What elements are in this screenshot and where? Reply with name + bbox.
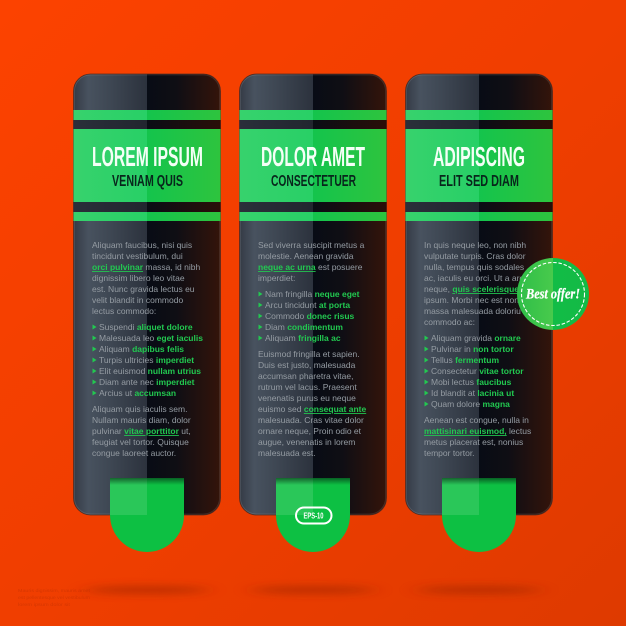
body text: Tellus fermentum: [431, 355, 499, 365]
panel: dolor amet: [240, 74, 386, 552]
ribbon: [406, 110, 552, 221]
body text: euismo sed consequat ante: [258, 404, 366, 414]
panel: adipiscing: [406, 74, 552, 552]
body text: lectus commodo:: [92, 306, 156, 316]
body text: neque, quis scelerisque: [424, 284, 519, 294]
body text: [92, 240, 203, 458]
body text: Aliquam gravida ornare: [431, 333, 521, 343]
tab: [276, 478, 350, 552]
body text: pulvinar vitae porttitor ut,: [92, 426, 191, 436]
badge: best offer: Best offer!: [525, 286, 580, 302]
body text: Nam fringilla neque eget: [265, 289, 360, 299]
body text: ornare neque, Proin odio et: [258, 426, 362, 436]
subheading: ELIT SED DIAM: [439, 173, 519, 190]
body text: venenatis purus eu neque: [258, 393, 356, 403]
body text: augue, venenatis in lorem: [258, 437, 355, 447]
body text: Aliquam dapibus felis: [99, 344, 184, 354]
floor shadows: [85, 586, 541, 594]
card body: [240, 74, 386, 515]
heading: ADIPISCING: [433, 141, 525, 172]
body text: Duis est justo, malesuada: [258, 360, 356, 370]
body text: dignissim libero leo vitae: [92, 273, 185, 283]
label: EPS-10: [296, 508, 332, 524]
body text: Diam condimentum: [265, 322, 343, 332]
body text: Turpis ultricies imperdiet: [99, 355, 194, 365]
body text: commodo ac:: [424, 317, 475, 327]
body text: malesuada est.: [258, 448, 316, 458]
fine print: lorem ipsum dolor sit: [18, 602, 71, 607]
ribbon: [240, 110, 386, 221]
heading: LOREM IPSUM: [92, 141, 203, 172]
body text: Aenean est congue, nulla in: [424, 415, 529, 425]
body text: Quam dolore magna: [431, 399, 510, 409]
ribbon: [74, 110, 220, 221]
body text: congue laoreet auctor.: [92, 448, 176, 458]
body text: massa malesuada doloriu: [424, 306, 521, 316]
body text: vulputate turpis. Cras dolor: [424, 251, 526, 261]
subheading: VENIAM QUIS: [112, 173, 183, 190]
body text: malesuada. Cras vitae dolor: [258, 415, 364, 425]
badge: best offer: [517, 258, 589, 330]
body text: Malesuada leo eget iaculis: [99, 333, 203, 343]
subheading: CONSECTETUER: [271, 173, 356, 190]
body text: Id blandit at lacinia ut: [431, 388, 514, 398]
body text: imperdiet:: [258, 273, 295, 283]
body text: In quis neque leo, non nibh: [424, 240, 526, 250]
body text: Commodo donec risus: [265, 311, 355, 321]
body text: Aliquam quis iaculis sem.: [92, 404, 187, 414]
body text: est. Nunc gravida lectus eu: [92, 284, 195, 294]
body text: Nullam mauris diam, dolor: [92, 415, 191, 425]
body text: molestie. Aenean gravida: [258, 251, 354, 261]
body text: Pulvinar in non tortor: [431, 344, 514, 354]
body text: Diam ante nec imperdiet: [99, 377, 195, 387]
label: EPS-10: EPS-10: [304, 510, 324, 520]
body text: orci pulvinar massa, id nibh: [92, 262, 200, 272]
body text: Arcu tincidunt at porta: [265, 300, 350, 310]
fine print: est pellentesque vel vestibulum: [18, 595, 90, 600]
body text: Arcius ut accumsan: [99, 388, 176, 398]
body text: accumsan pharetra vitae,: [258, 371, 353, 381]
body text: tincidunt vestibulum, dui: [92, 251, 183, 261]
body text: feugiat vel tortor. Quisque: [92, 437, 189, 447]
body text: velit blandit in commodo: [92, 295, 183, 305]
body text: Euismod fringilla et sapien.: [258, 349, 360, 359]
body text: [424, 240, 531, 458]
body text: nulla, tempus quis sodales: [424, 262, 524, 272]
fine print: Mauris dignissim, mauris amet: [18, 588, 91, 593]
body text: mattisinari euismod, lectus: [424, 426, 531, 436]
body text: Mobi lectus faucibus: [431, 377, 512, 387]
body text: rutrum vel lacus. Praesent: [258, 382, 357, 392]
body text: neque ac urna est posuere: [258, 262, 363, 272]
body text: Aliquam fringilla ac: [265, 333, 341, 343]
fine print: [18, 588, 91, 607]
card body: [74, 74, 220, 515]
body text: ac, iaculis eu orci. Ut a arcu: [424, 273, 529, 283]
tab: [442, 478, 516, 552]
body text: Consectetur vitae tortor: [431, 366, 524, 376]
body text: ipsum. Morbi nec est non: [424, 295, 519, 305]
body text: [258, 240, 366, 458]
body text: Aliquam faucibus, nisi quis: [92, 240, 192, 250]
body text: tempor tortor.: [424, 448, 475, 458]
card body: [406, 74, 552, 515]
body text: Suspendi aliquet dolore: [99, 322, 193, 332]
body text: Elit euismod nullam utrius: [99, 366, 201, 376]
body text: Sed viverra suscipit metus a: [258, 240, 365, 250]
heading: DOLOR AMET: [261, 141, 365, 172]
panel: lorem ipsum: [74, 74, 220, 552]
tab: [110, 478, 184, 552]
body text: metus placerat est, nonius: [424, 437, 523, 447]
